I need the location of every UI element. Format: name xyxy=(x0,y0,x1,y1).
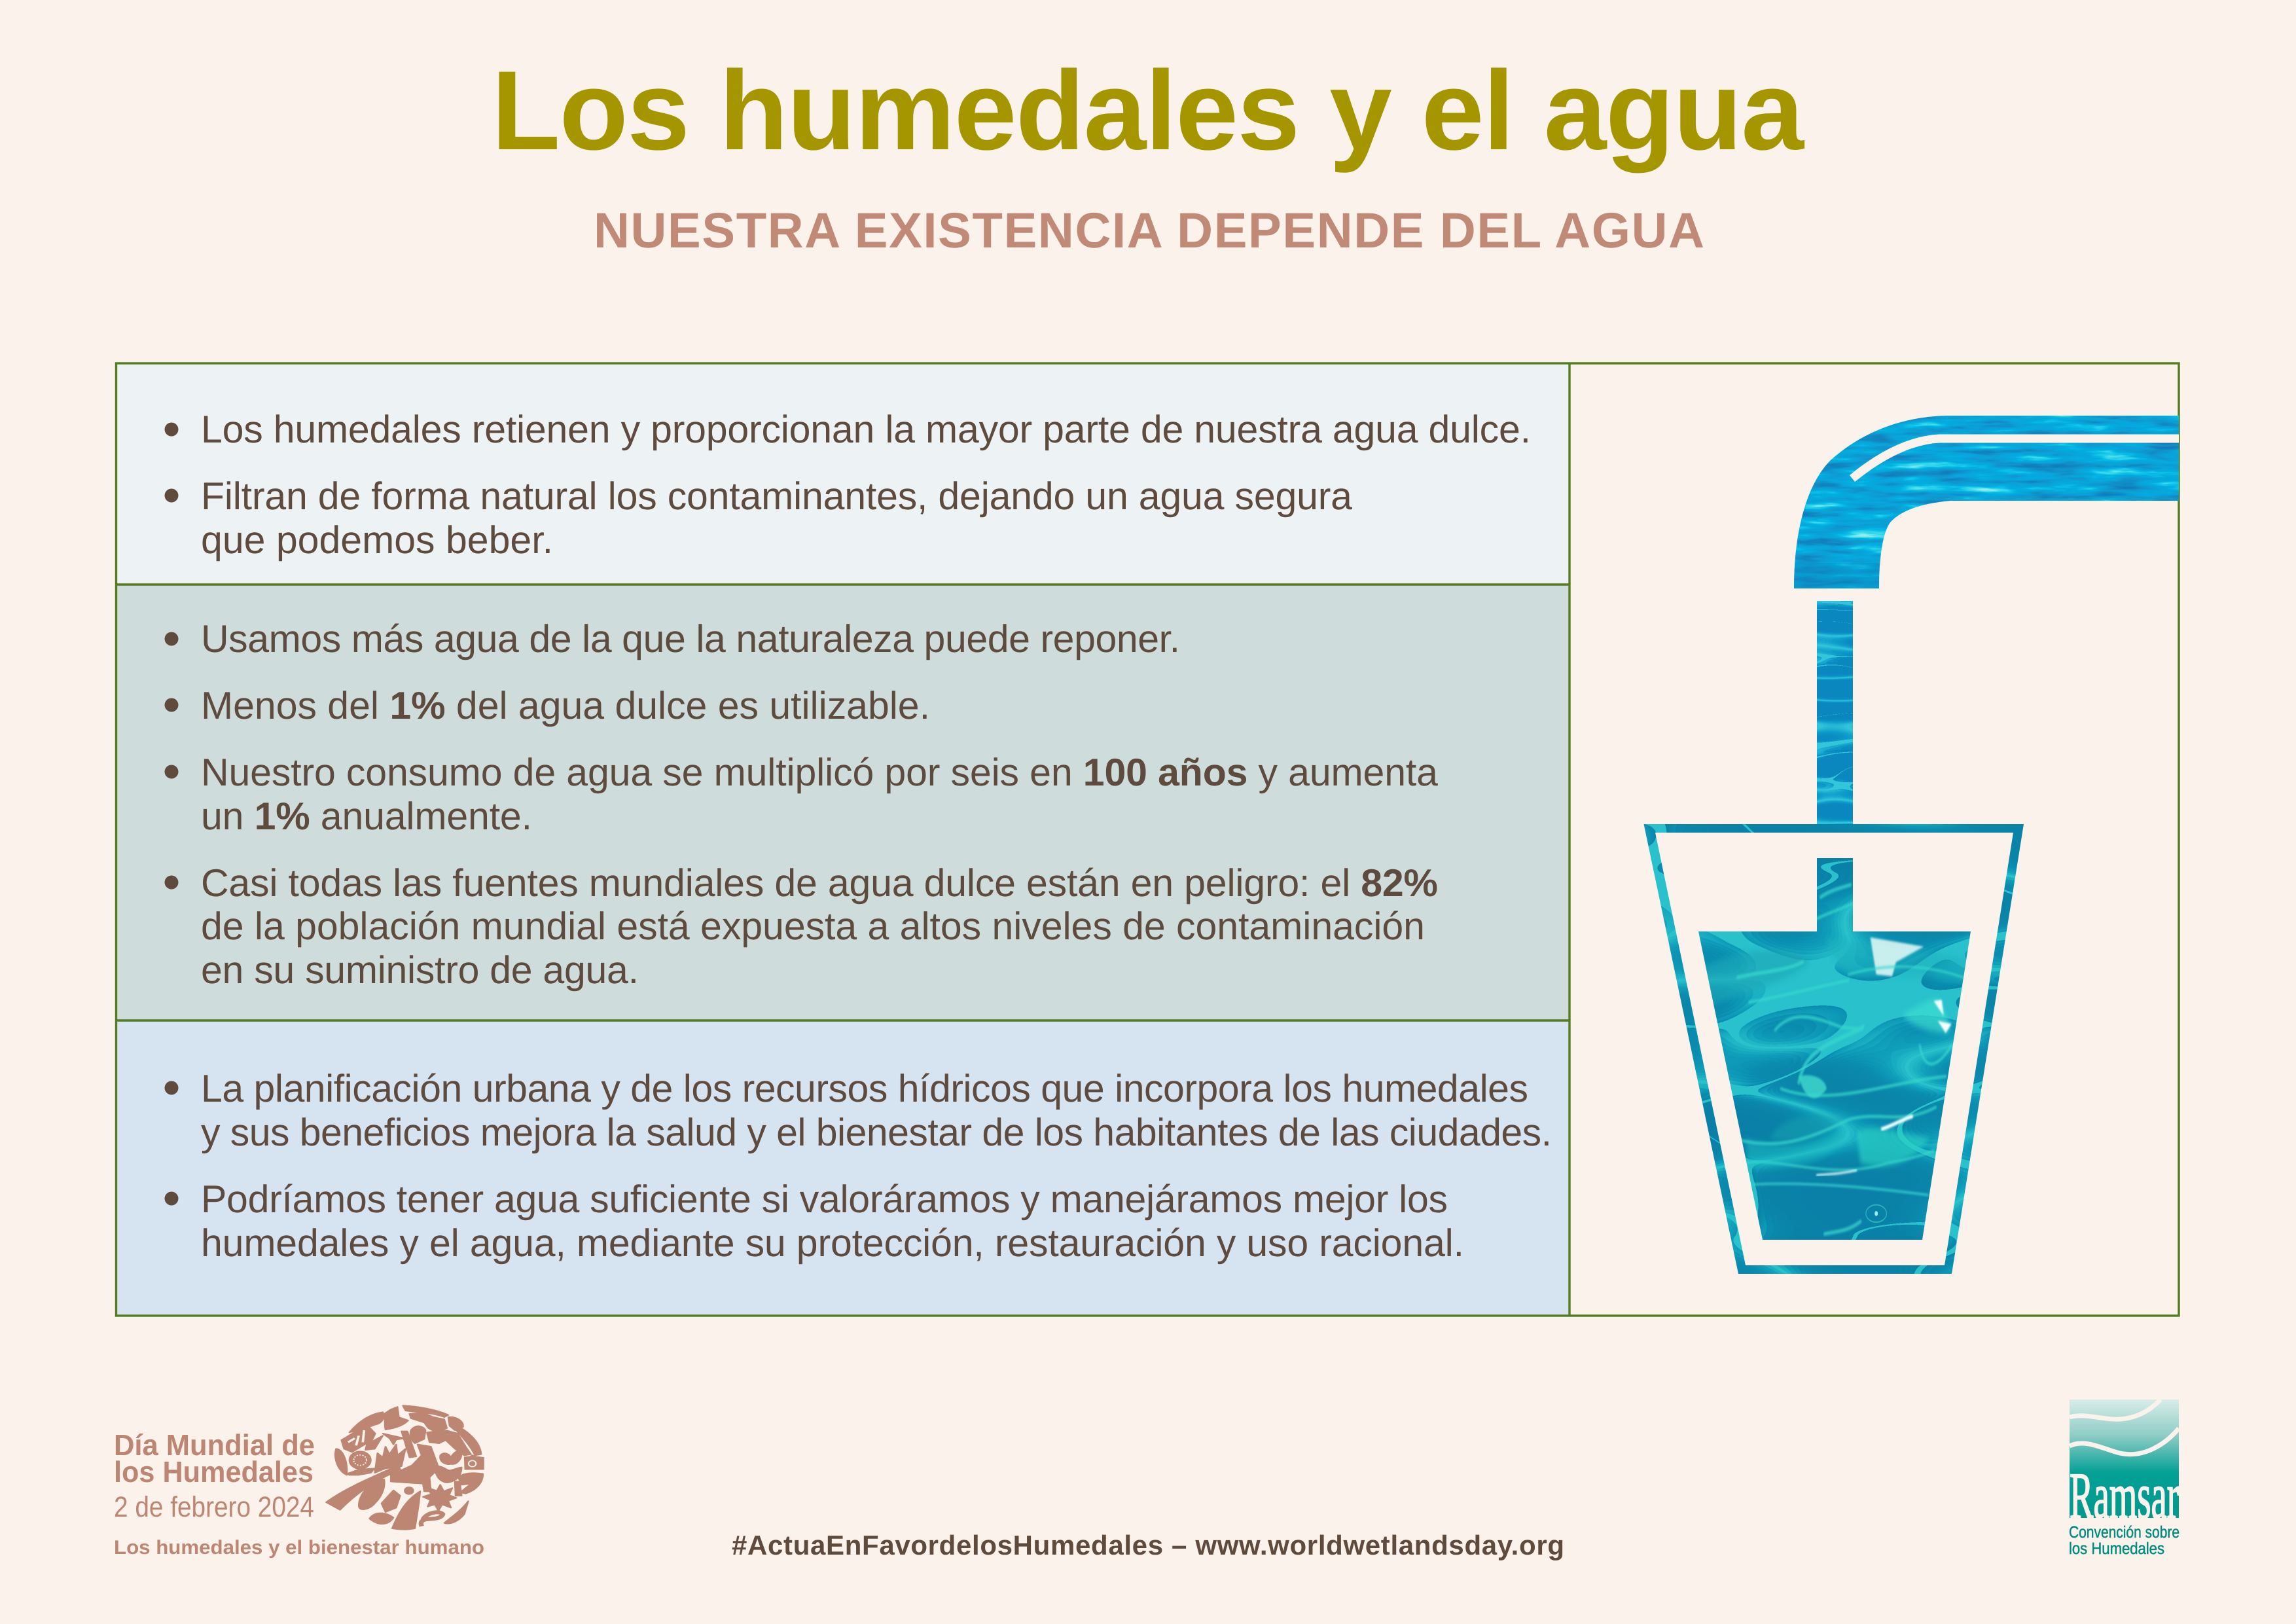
bullet list: third panel: Podríamos tener agua suficiente si valoráramos y manejáramos mejor los xyxy=(201,1178,1448,1221)
icon: water tap pouring into a glass xyxy=(1636,409,2179,1276)
bullet list: first panel: Filtran de forma natural los contaminantes, dejando un agua segura xyxy=(201,475,1352,518)
icon: glass outline xyxy=(1636,818,2029,1276)
table frame xyxy=(117,363,2179,1316)
logo text: Día Mundial de los Humedales: Día Mundial de xyxy=(114,1428,315,1462)
logo caption xyxy=(2069,1523,2179,1558)
bullet list: first panel: que podemos beber. xyxy=(201,518,553,562)
panel: wetlands provide fresh water xyxy=(117,363,1570,585)
logo: World Wetlands Day xyxy=(114,1405,484,1559)
logo emblem xyxy=(326,1405,484,1530)
bullet list: third panel: La planificación urbana y de los recursos hídricos que incorpora los humedales xyxy=(201,1067,1528,1110)
bullet list: second panel: Usamos más agua de la que la naturaleza puede reponer. xyxy=(201,617,1180,660)
bullet list: third panel xyxy=(165,1067,1552,1265)
logo text: Día Mundial de los Humedales: los Humedales xyxy=(114,1455,314,1489)
hashtag and website: #ActuaEnFavordelosHumedales – www.worldwetlandsday.org xyxy=(732,1530,1564,1561)
logo square with waves: Ramsar xyxy=(2070,1459,2179,1532)
logo caption: los Humedales xyxy=(2069,1540,2164,1558)
bullet list: second panel: Menos del 1% del agua dulce es utilizable. xyxy=(201,684,930,727)
icon: water in glass xyxy=(1692,854,1977,1244)
bullet list: second panel: Casi todas las fuentes mundiales de agua dulce están en peligro: el 82% xyxy=(201,861,1438,905)
bullet list: second panel: en su suministro de agua. xyxy=(201,948,639,992)
bullet list: second panel: de la población mundial está expuesta a altos niveles de contaminación xyxy=(201,905,1425,948)
icon: tap xyxy=(1787,409,2179,596)
subtitle: NUESTRA EXISTENCIA DEPENDE DEL AGUA xyxy=(594,203,1704,259)
logo square with waves xyxy=(2070,1399,2179,1532)
bullet list: second panel xyxy=(165,617,1438,992)
bullet list: first panel xyxy=(165,408,1531,562)
bullet list: first panel: Los humedales retienen y proporcionan la mayor parte de nuestra agua dulce. xyxy=(201,408,1531,451)
panel: water consumption facts xyxy=(117,585,1570,1020)
logo text: date: 2 de febrero 2024 xyxy=(114,1491,314,1523)
panel: planning and wise use xyxy=(117,1020,1570,1316)
title: Los humedales y el agua xyxy=(492,48,1804,173)
logo text: Día Mundial de los Humedales xyxy=(114,1428,315,1489)
logo text: theme: Los humedales y el bienestar humano xyxy=(114,1537,484,1559)
bullet list: second panel: un 1% anualmente. xyxy=(201,795,532,838)
icon: falling water stream xyxy=(1817,601,1853,824)
logo caption: Convención sobre xyxy=(2069,1523,2179,1542)
bullet list: second panel: Nuestro consumo de agua se multiplicó por seis en 100 años y aumenta xyxy=(201,751,1438,794)
bullet list: third panel: humedales y el agua, mediante su protección, restauración y uso racional. xyxy=(201,1221,1464,1265)
bullet list: third panel: y sus beneficios mejora la salud y el bienestar de los habitantes de las ciudades. xyxy=(201,1111,1552,1154)
logo: Ramsar Convention xyxy=(2069,1399,2179,1558)
